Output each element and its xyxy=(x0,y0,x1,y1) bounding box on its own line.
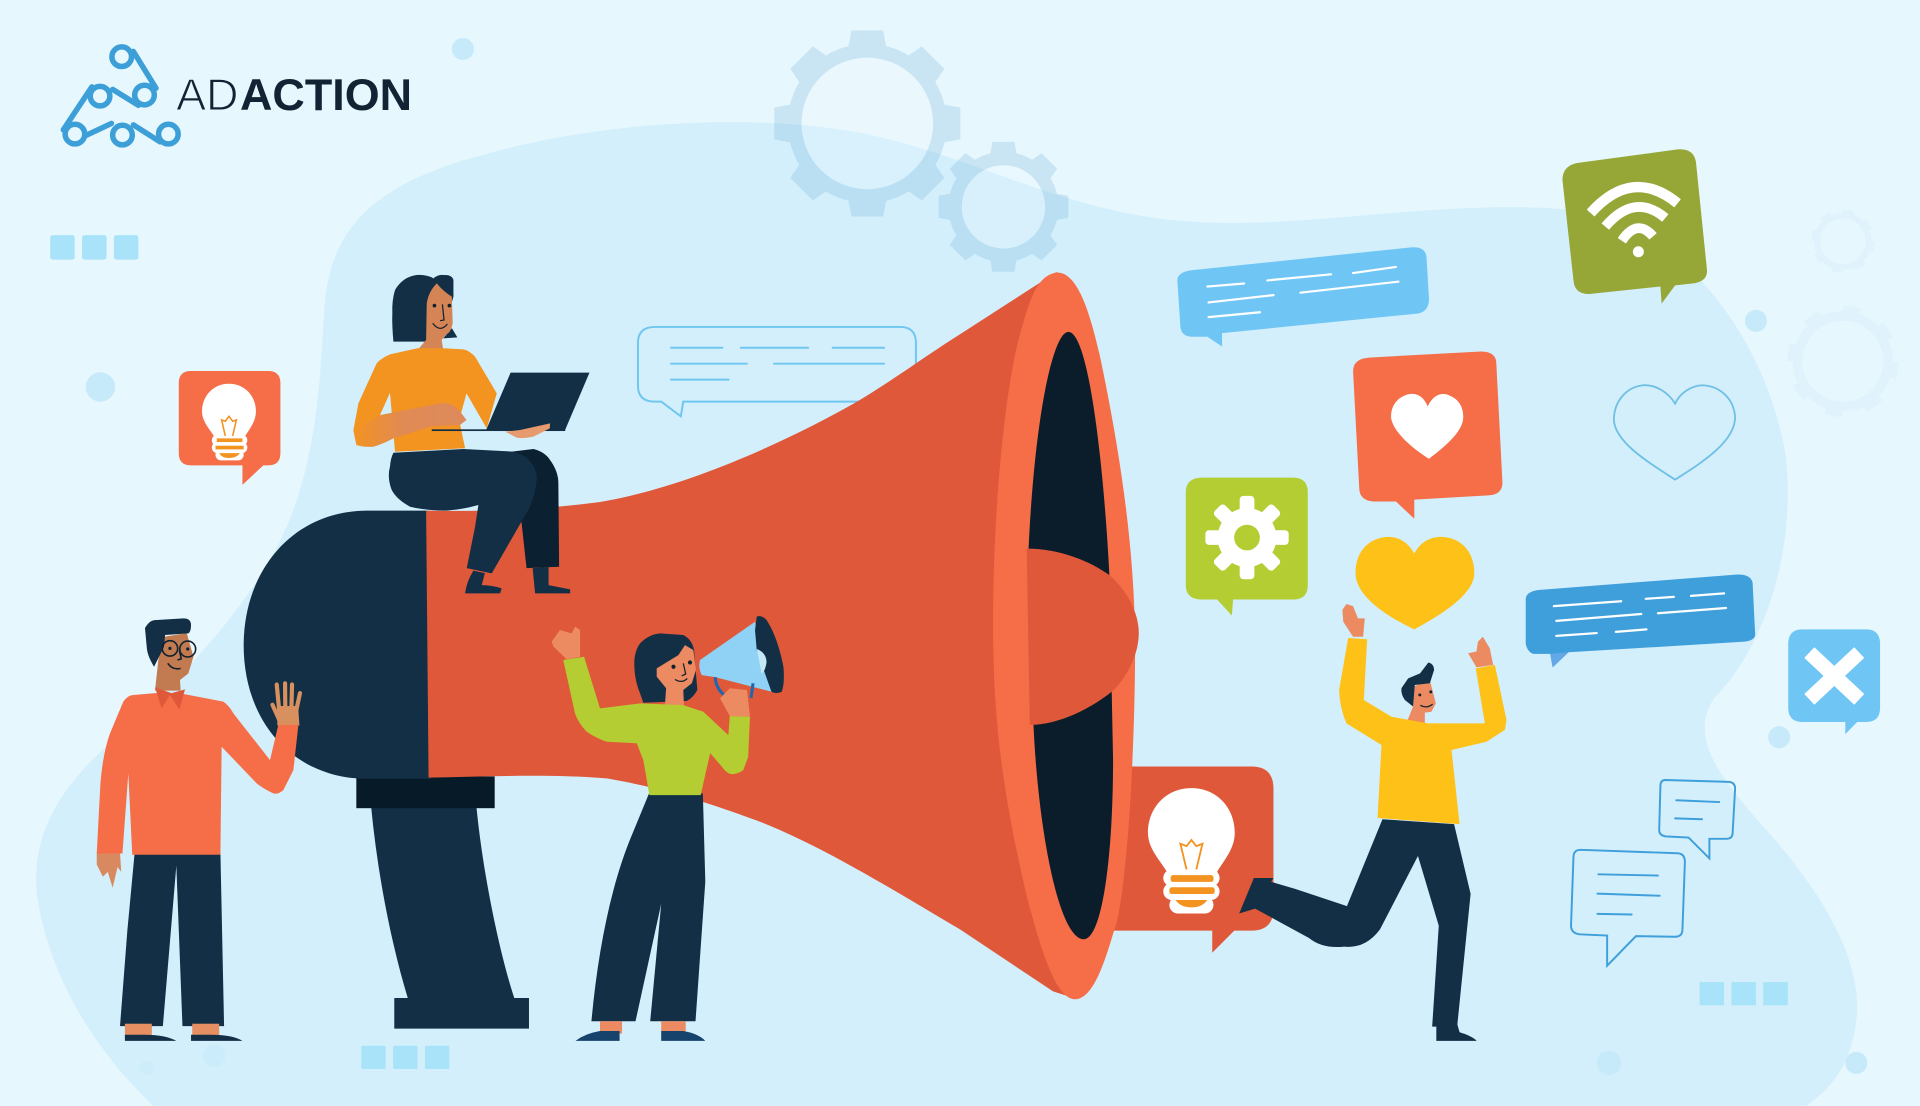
speech bubble: large outline xyxy=(1571,850,1685,966)
decorative squares: top left xyxy=(50,235,138,260)
speech bubble: gear settings xyxy=(1186,478,1308,615)
speech bubble: heart xyxy=(1353,351,1502,519)
icon: faint gear lower right xyxy=(1791,310,1894,413)
decorative squares: bottom right xyxy=(1700,982,1788,1005)
person: woman with small megaphone xyxy=(552,616,784,1041)
person: man with glasses xyxy=(97,618,300,1041)
speech bubble: wifi xyxy=(1562,149,1707,304)
speech bubble: small outline xyxy=(1659,780,1735,858)
logo wordmark: AD xyxy=(176,71,239,120)
icon: yellow heart xyxy=(1356,537,1474,629)
speech bubble: small lightbulb xyxy=(179,371,280,485)
speech bubble: dark blue message xyxy=(1526,575,1755,667)
logo wordmark: ACTION xyxy=(240,71,412,120)
megaphone xyxy=(244,272,1139,999)
decorative squares: bottom centre xyxy=(361,1046,449,1069)
speech bubble: large lightbulb xyxy=(1102,767,1273,953)
icon: small gear xyxy=(939,142,1068,272)
icon: outline heart xyxy=(1614,385,1735,480)
speech bubble: close icon xyxy=(1788,629,1880,734)
person: running man in yellow xyxy=(1239,604,1506,1041)
megaphone stand xyxy=(356,776,529,1029)
person: woman with laptop xyxy=(353,275,589,593)
speech bubble: light blue message xyxy=(1177,247,1429,347)
icon: faint gear upper right xyxy=(1813,212,1872,271)
icon: large gear xyxy=(774,30,960,216)
logo mark xyxy=(63,47,178,145)
speech bubble: outline behind megaphone xyxy=(638,327,916,416)
